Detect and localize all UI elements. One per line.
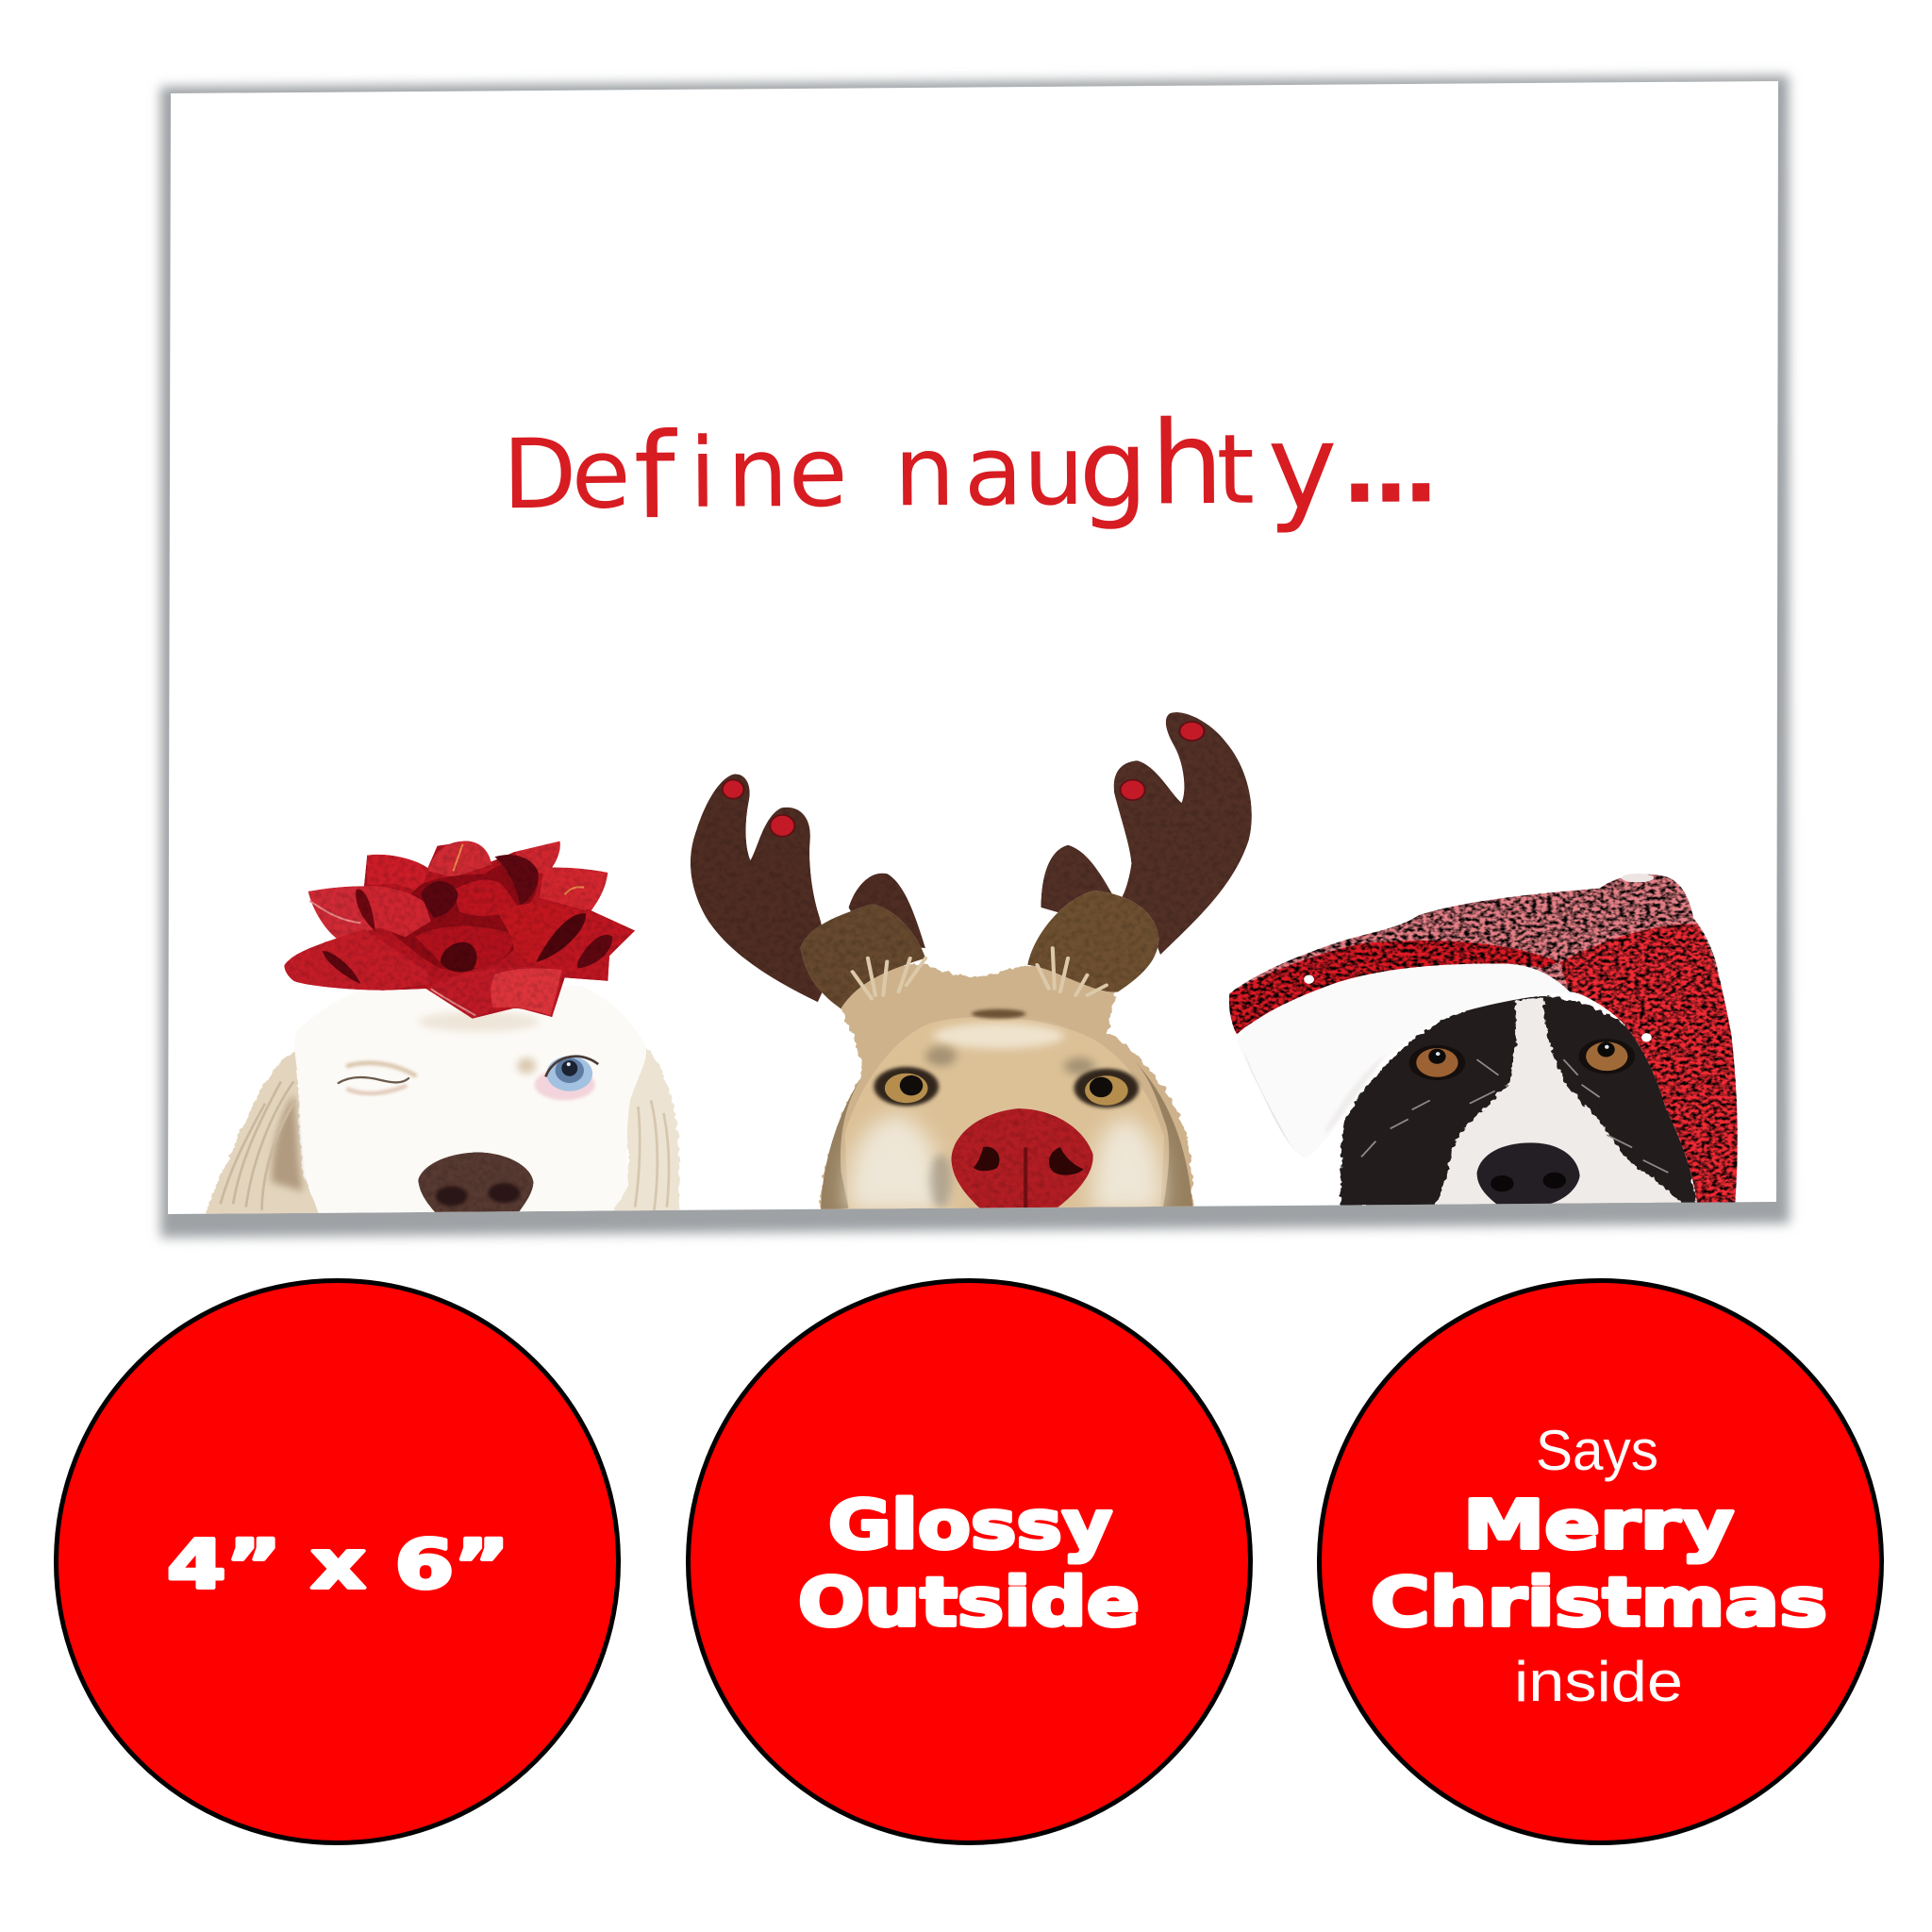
head bbox=[294, 986, 646, 1215]
heading: Define naughty: e bbox=[571, 418, 631, 531]
dog: white winking dog with bow bbox=[205, 841, 679, 1215]
nose bbox=[1477, 1142, 1580, 1206]
left eye bbox=[874, 1067, 939, 1106]
right eye bbox=[1074, 1069, 1139, 1108]
head bbox=[1340, 996, 1695, 1206]
heading: Define naughty: a bbox=[963, 415, 1024, 528]
left ear bbox=[205, 1050, 319, 1215]
badge: message bbox=[1319, 1281, 1881, 1843]
red gift bow bbox=[284, 841, 635, 1019]
pale ear fur bbox=[853, 948, 1107, 999]
heading: Define naughty: t bbox=[1216, 414, 1255, 526]
shadow under bow bbox=[418, 1011, 540, 1032]
face bbox=[821, 1009, 1193, 1211]
finish label bbox=[798, 1486, 1140, 1641]
illustration: three dogs in festive costumes bbox=[205, 712, 1738, 1215]
left antler bbox=[691, 774, 925, 1002]
heading: Define naughty: e bbox=[788, 417, 848, 529]
badge: finish bbox=[689, 1281, 1251, 1843]
message label: Merry bbox=[1463, 1486, 1734, 1564]
finish label: Glossy bbox=[828, 1486, 1112, 1564]
message label: Says bbox=[1536, 1419, 1658, 1482]
right ear bbox=[1027, 891, 1158, 992]
left ear bbox=[801, 904, 925, 1008]
hat white brim bbox=[1237, 964, 1570, 1157]
heading: Define naughty: n bbox=[726, 417, 789, 530]
message label: Christmas bbox=[1371, 1563, 1827, 1641]
red nose bbox=[951, 1108, 1093, 1211]
heading: Define naughty: n bbox=[893, 416, 956, 528]
winking eye bbox=[339, 1063, 415, 1093]
heading: Define naughty: f bbox=[633, 408, 678, 545]
nose bbox=[418, 1152, 534, 1215]
dog: black and white dog in santa hat bbox=[1229, 874, 1738, 1206]
right antler bbox=[1041, 712, 1252, 955]
white blaze and muzzle bbox=[1434, 998, 1683, 1206]
fur streaks bbox=[1361, 1059, 1668, 1173]
blue eye bbox=[517, 1056, 598, 1100]
badge: size bbox=[57, 1281, 619, 1843]
panel: greeting card bbox=[160, 75, 1790, 1238]
right eye bbox=[1578, 1039, 1635, 1074]
heading: Define naughty: . bbox=[1341, 413, 1378, 525]
heading: Define naughty: . bbox=[1372, 413, 1409, 525]
antler jewels bbox=[723, 722, 1205, 837]
right ear bbox=[614, 1046, 681, 1211]
heading: Define naughty: h bbox=[1150, 396, 1224, 530]
heading: Define naughty: g bbox=[1078, 406, 1148, 533]
heading: Define naughty: D bbox=[502, 419, 577, 531]
message label bbox=[1371, 1419, 1827, 1713]
santa hat sequins bbox=[1229, 874, 1738, 1204]
heading: Define naughty: i bbox=[689, 418, 717, 530]
heading: Define naughty: u bbox=[1023, 415, 1085, 527]
dog: reindeer dog with antlers and red nose bbox=[691, 712, 1252, 1211]
heading: Define naughty: . bbox=[1402, 412, 1440, 525]
size label: 4” x 6” bbox=[167, 1525, 509, 1604]
left eye bbox=[1409, 1045, 1465, 1080]
head fur bbox=[820, 964, 1193, 1211]
finish label: Outside bbox=[798, 1563, 1140, 1641]
message label: inside bbox=[1514, 1650, 1683, 1713]
heading: Define naughty: y bbox=[1267, 399, 1338, 537]
